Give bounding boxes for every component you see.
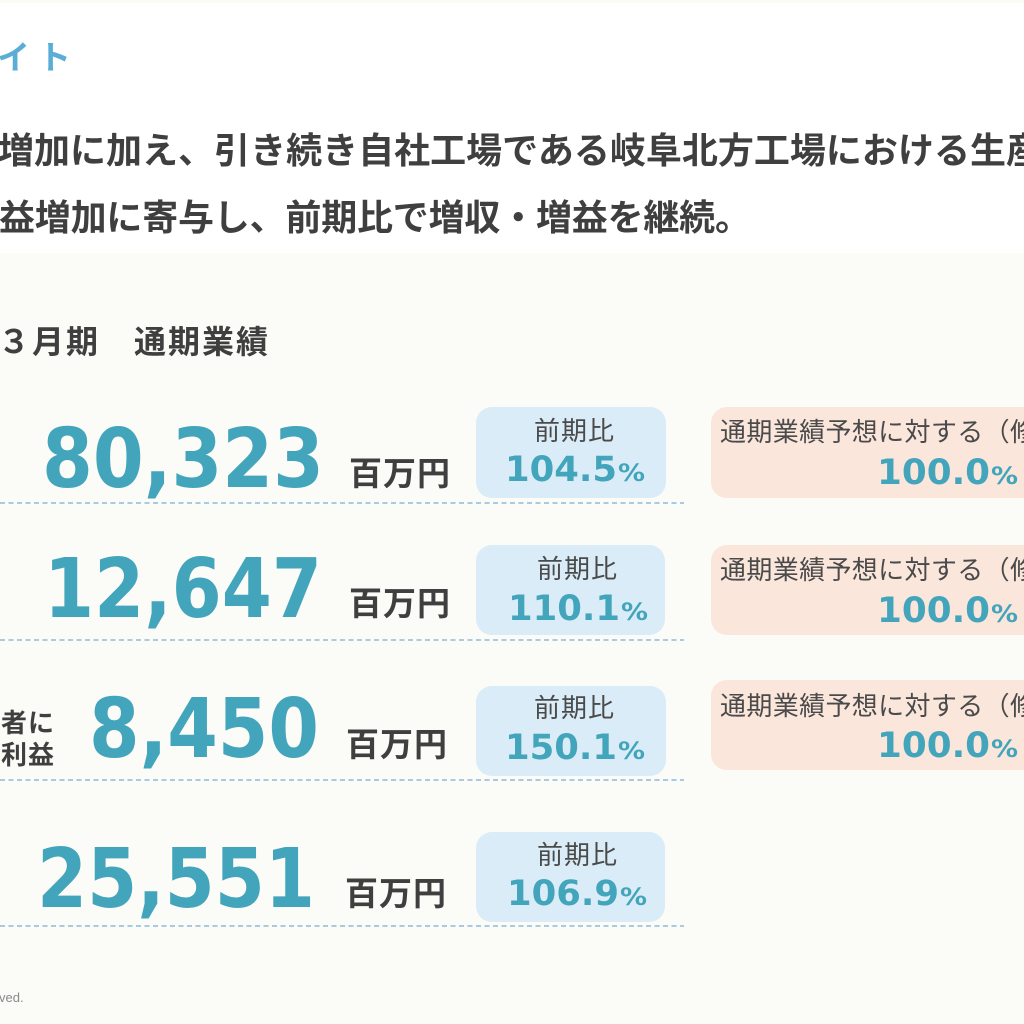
metric row 4: 百万円 (345, 867, 446, 915)
metric row 2: 百万円 (349, 577, 450, 625)
metric row 1: % (991, 462, 1018, 490)
metric row 1: % (618, 459, 645, 487)
metric row 4 (0, 832, 684, 927)
metric row 3: % (618, 737, 645, 765)
metric row 3: 8,450 (89, 682, 319, 777)
metric row 1: 百万円 (349, 447, 450, 495)
metric row 3: 100.0 (877, 726, 990, 766)
metric row 3: % (991, 735, 1018, 763)
metric row 2: 100.0 (877, 591, 990, 631)
metric row 3: 百万円 (346, 718, 447, 766)
metric row 1: 104.5 (505, 450, 617, 490)
metric row 1: 80,323 (42, 412, 324, 507)
metric row 4: 106.9 (507, 874, 619, 914)
metric row 4: 前期比 (537, 835, 617, 872)
metric row 2: 110.1 (508, 589, 620, 629)
metric row 2: % (991, 600, 1018, 628)
metric row 3 (0, 680, 1024, 780)
metric row 1: 前期比 (534, 411, 614, 448)
metric row 2 (0, 542, 1024, 640)
metric row 4: % (620, 883, 647, 911)
panel heading: ３月期 通期業績 (0, 317, 268, 363)
metric row 1: 100.0 (877, 453, 990, 493)
summary text: 増加に加え、引き続き自社工場である岐阜北方工場における生産 (0, 122, 1024, 174)
metric row 3: 150.1 (505, 728, 617, 768)
metric row 4: 25,551 (37, 832, 315, 927)
panel: full-year results (0, 253, 1024, 1024)
metric row 1 (0, 407, 1024, 507)
metric row 2: 前期比 (537, 549, 617, 586)
metric row 3: 前期比 (534, 688, 614, 725)
metric row 3: 者に (1, 703, 54, 740)
metric row 2: 12,647 (44, 542, 322, 637)
metric row 2: % (621, 598, 648, 626)
summary text: 益増加に寄与し、前期比で増収・増益を継続。 (0, 189, 751, 241)
summary text (0, 122, 1024, 241)
metric row 3: 利益 (1, 735, 54, 772)
